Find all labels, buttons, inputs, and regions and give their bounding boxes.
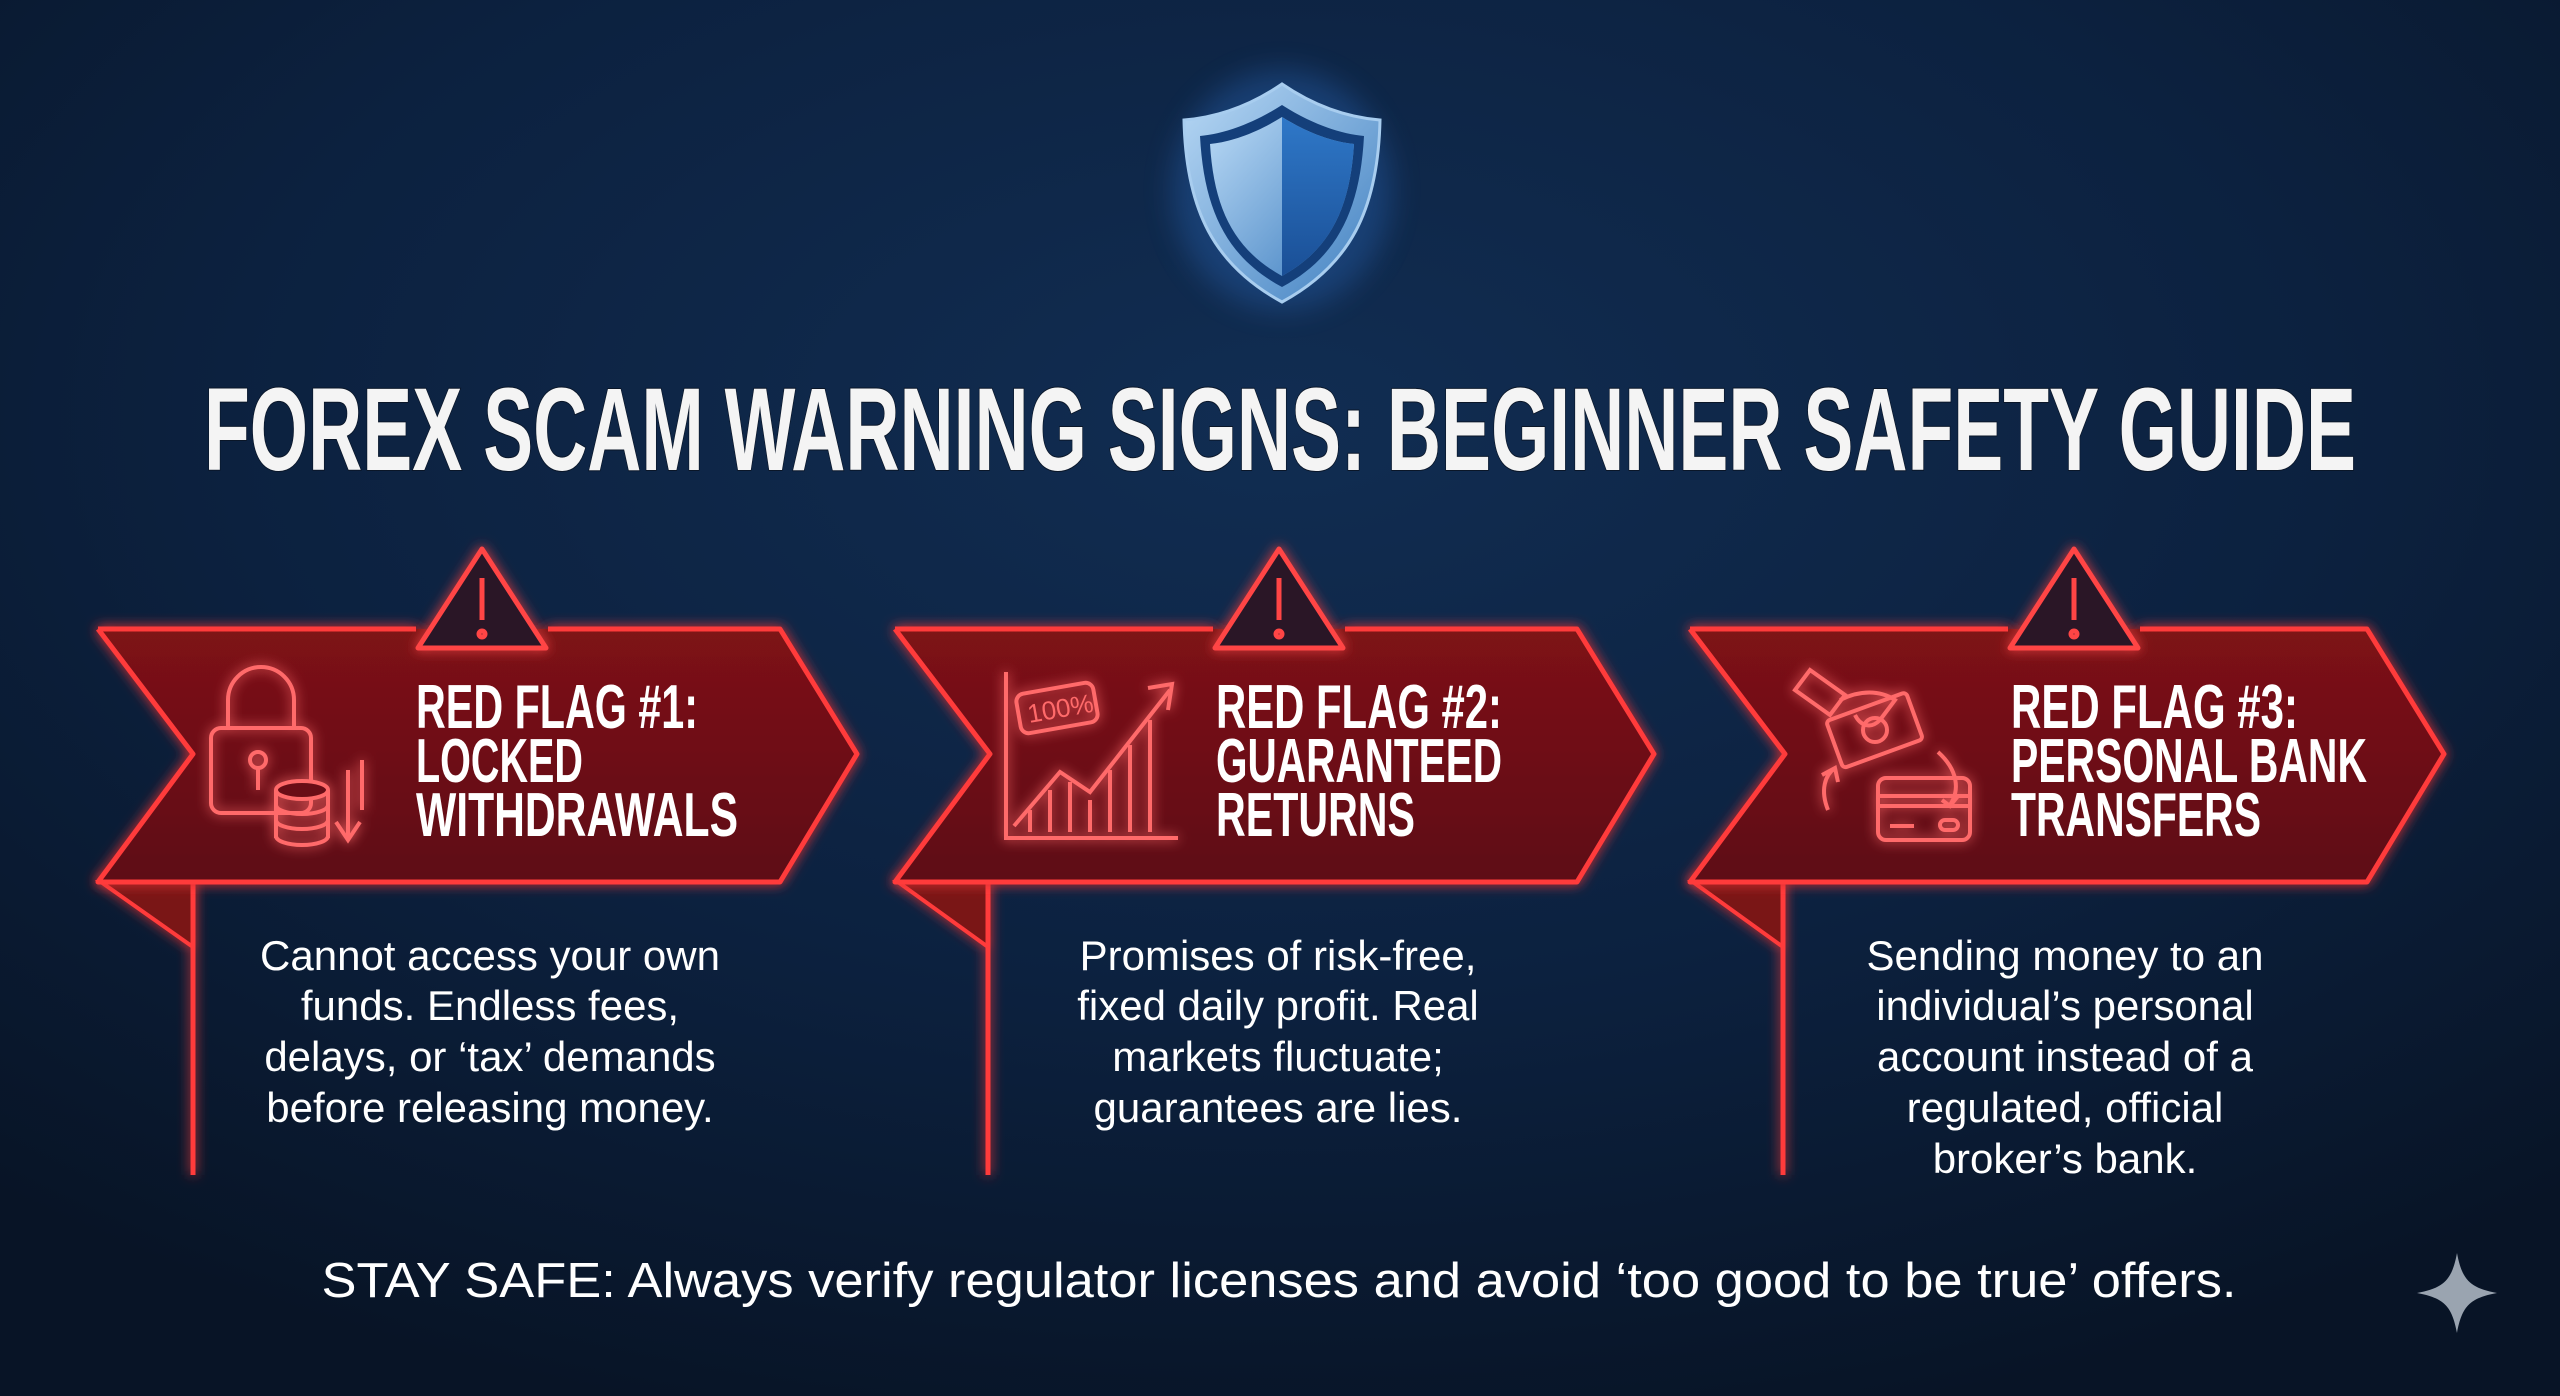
body text (1867, 932, 2263, 1182)
heading: RED FLAG #3: (2011, 673, 2298, 742)
flag post (898, 882, 988, 1175)
body text: markets fluctuate; (1112, 1033, 1444, 1080)
heading: RETURNS (1216, 781, 1415, 850)
chevron banner (1690, 629, 2444, 882)
heading (2011, 673, 2367, 850)
body text: individual’s personal (1876, 982, 2254, 1029)
panel: red flag 1 (98, 549, 857, 1175)
heading: WITHDRAWALS (416, 781, 738, 850)
body text (1077, 932, 1479, 1131)
heading: RED FLAG #2: (1216, 673, 1502, 742)
body text: guarantees are lies. (1094, 1084, 1462, 1131)
footer callout: STAY SAFE: Always verify regulator licenses and avoid ‘too good to be true’ offers. (322, 1254, 2236, 1308)
panel: red flag 3 (1690, 549, 2444, 1182)
icon: rising chart 100% (1006, 672, 1178, 838)
icon: hand money card transfer (1795, 670, 1970, 840)
icon: lock with coins (211, 667, 362, 845)
body text: delays, or ‘tax’ demands (264, 1033, 716, 1080)
body text: broker’s bank. (1933, 1135, 2197, 1182)
icon: warning triangle (1215, 549, 1343, 648)
heading: GUARANTEED (1216, 727, 1502, 796)
body text: funds. Endless fees, (301, 982, 679, 1029)
flag post (1693, 882, 1783, 1175)
heading: RED FLAG #1: (416, 673, 698, 742)
icon: warning triangle (418, 549, 546, 648)
heading: TRANSFERS (2011, 781, 2261, 850)
body text: regulated, official (1907, 1084, 2223, 1131)
chevron banner (98, 629, 857, 882)
body text (260, 932, 720, 1131)
arrow: connector 2 to 3 (1654, 752, 1690, 756)
panel: red flag 2 (895, 549, 1654, 1175)
body text: account instead of a (1877, 1033, 2254, 1080)
body text: Sending money to an (1867, 932, 2263, 979)
arrow: connector 1 to 2 (857, 752, 895, 756)
heading: LOCKED (416, 727, 583, 796)
icon: shield (1172, 70, 1392, 310)
flag post (101, 882, 193, 1175)
chevron banner (895, 629, 1654, 882)
body text: Promises of risk-free, (1080, 932, 1476, 979)
body text: fixed daily profit. Real (1077, 982, 1479, 1029)
heading (1216, 673, 1502, 850)
icon: warning triangle (2010, 549, 2138, 648)
icon: sparkle (2417, 1253, 2497, 1333)
heading (416, 673, 738, 850)
body text: Cannot access your own (260, 932, 720, 979)
icon: rising chart 100%: 100% (1025, 688, 1096, 729)
heading: PERSONAL BANK (2011, 727, 2367, 796)
body text: before releasing money. (266, 1084, 714, 1131)
